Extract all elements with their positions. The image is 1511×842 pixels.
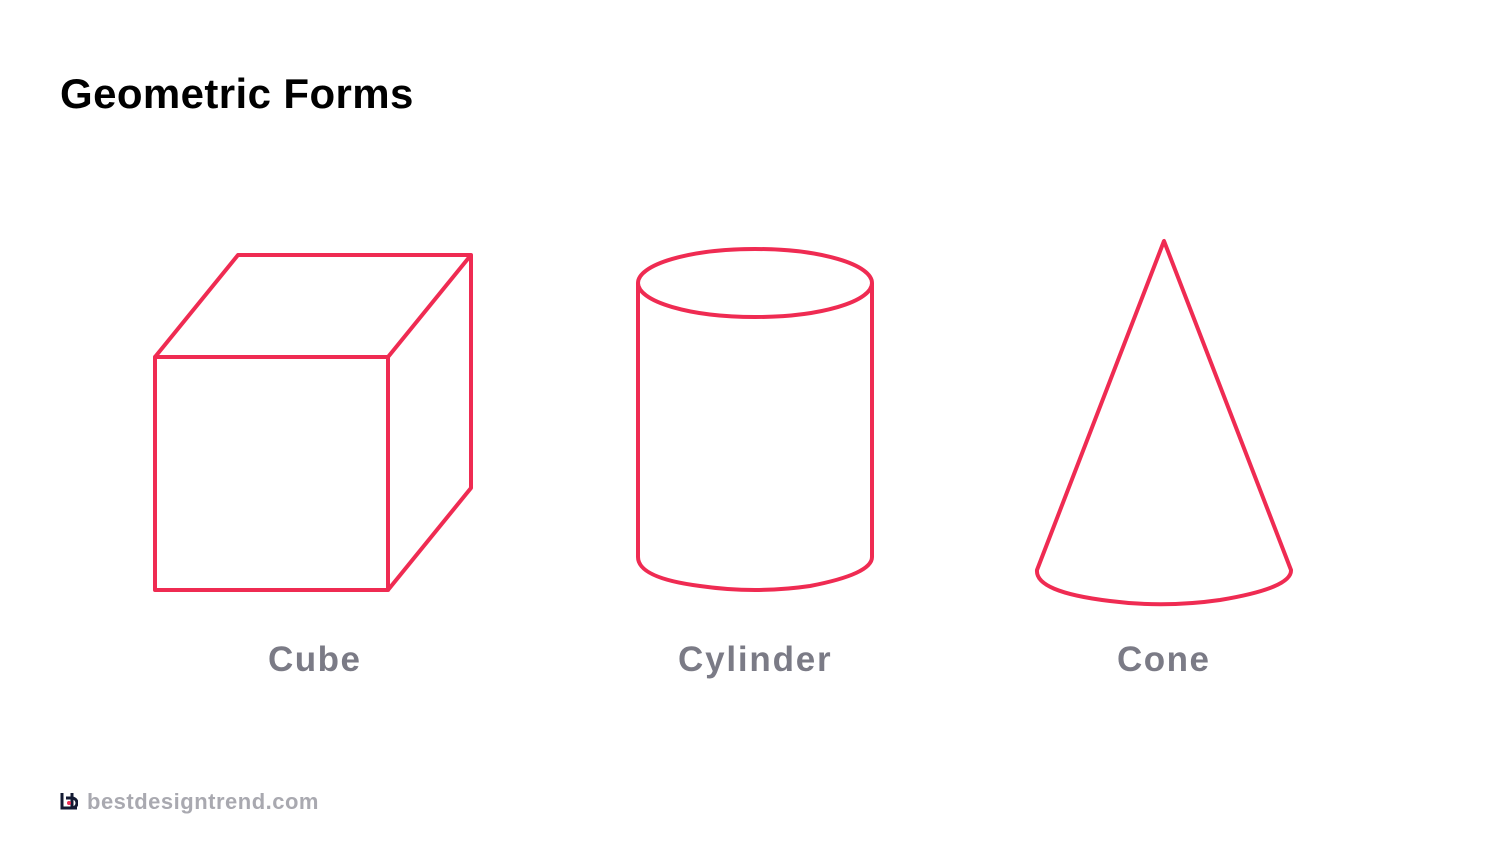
- label: cone: Cone: [1117, 640, 1210, 679]
- cone: [1037, 241, 1291, 604]
- title: Geometric Forms: [60, 70, 414, 117]
- icon: logo: [60, 793, 78, 810]
- cylinder: [638, 249, 872, 590]
- footer logo: bestdesigntrend.com: [87, 789, 319, 814]
- label: cylinder: Cylinder: [678, 640, 832, 679]
- cube: [155, 255, 471, 590]
- label: cube: Cube: [268, 640, 362, 679]
